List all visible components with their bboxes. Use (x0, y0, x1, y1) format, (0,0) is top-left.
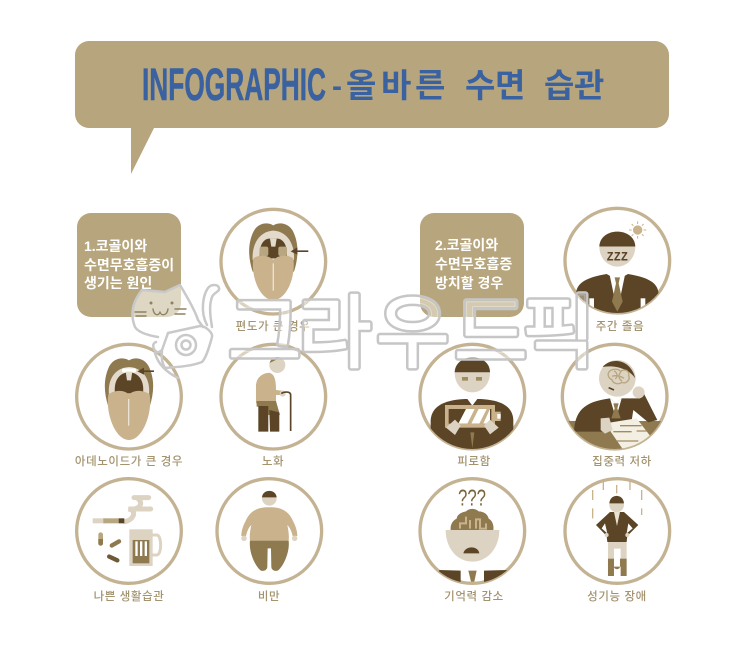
label: 주간 졸음: 주간 졸음 (596, 320, 644, 333)
label: 편도가 큰 경우: 편도가 큰 경우 (236, 320, 310, 333)
icon: enlarged adenoids (77, 344, 181, 449)
icon: memory loss (420, 479, 525, 585)
panel: causes heading (77, 213, 181, 317)
title text (142, 59, 604, 110)
icon: enlarged tonsils (221, 209, 326, 314)
label: 나쁜 생활습관: 나쁜 생활습관 (94, 589, 164, 603)
icon: bad habits (77, 479, 181, 583)
panel: prevention heading (420, 213, 524, 317)
infographic (75, 41, 672, 602)
panel: prevention heading: 2.코골이와 (435, 237, 498, 253)
label: 아데노이드가 큰 경우: 아데노이드가 큰 경우 (75, 454, 183, 468)
battery (445, 405, 501, 428)
pills (98, 532, 122, 563)
watermark: cat with camera (132, 285, 219, 378)
icon: sexual dysfunction (565, 479, 670, 583)
label: 노화: 노화 (262, 455, 284, 468)
icon: reduced concentration (560, 344, 670, 451)
title text: INFOGRAPHIC (142, 59, 326, 110)
panel: causes heading: 1.코골이와 (84, 238, 147, 254)
icon: elderly person with cane (221, 344, 326, 449)
label: 피로함: 피로함 (457, 454, 491, 468)
label: 기억력 감소: 기억력 감소 (444, 590, 504, 603)
panel: prevention heading: 수면무호흡증 (435, 256, 512, 272)
icon: memory loss: ??? (458, 485, 486, 511)
watermark: 그라우드픽: 그라우드픽 (228, 289, 596, 378)
label: 집중력 저하: 집중력 저하 (592, 455, 652, 468)
title text: - (332, 70, 342, 103)
title text: 올바른수면습관 (346, 67, 604, 104)
panel: causes heading: 수면무호흡증이 (84, 257, 174, 273)
beer mug (129, 529, 161, 566)
icon: fatigue (420, 344, 525, 450)
label: 비만: 비만 (258, 590, 280, 603)
sun (629, 221, 646, 239)
icon: daytime sleepiness (565, 208, 670, 315)
title speech bubble (75, 41, 669, 174)
icon: obese person (217, 479, 322, 583)
watermark: 그라우드픽: 그라우드픽 (228, 289, 596, 378)
icon: daytime sleepiness: ZZZ (607, 250, 628, 265)
smoke (125, 498, 151, 522)
panel: causes heading: 생기는 원인 (84, 275, 152, 291)
brain (451, 509, 493, 530)
panel: prevention heading: 방치할 경우 (435, 275, 503, 291)
cigarette (93, 518, 124, 523)
label: 성기능 장애: 성기능 장애 (587, 590, 647, 603)
